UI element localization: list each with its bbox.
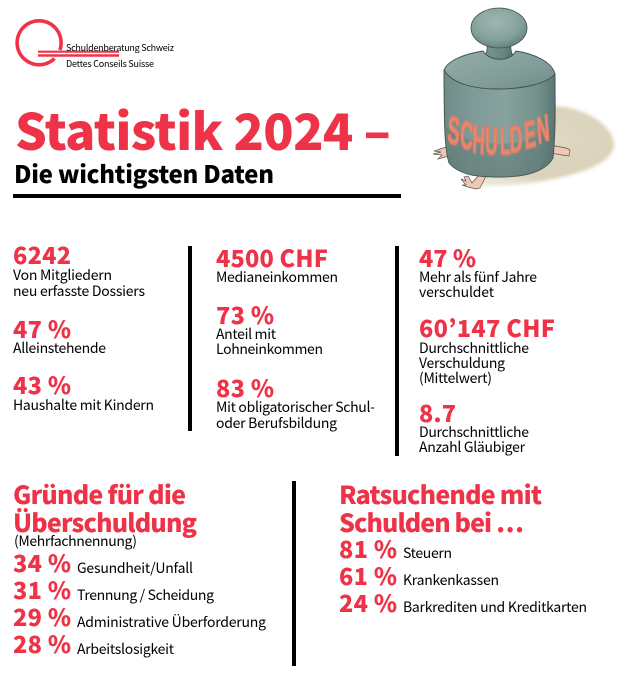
shadow — [468, 106, 614, 186]
stat: 60’147 CHF: Durchschnittliche — [419, 338, 529, 358]
illustration: weight labelled SCHULDEN crushing a person — [433, 8, 614, 189]
stat: 4500 CHF: Medianeinkommen — [216, 267, 338, 287]
row: 31 %: 31 % — [13, 572, 71, 606]
panel: Ratsuchende mit Schulden bei — [339, 476, 587, 619]
SCHULDEN label: H — [472, 118, 486, 163]
row: 81 %: 81 % — [339, 531, 397, 565]
row: 29 %: 29 % — [13, 599, 71, 633]
stat: 83 % — [216, 370, 375, 433]
row: 61 %: Krankenkassen — [403, 570, 499, 590]
title: Statistik 2024 – — [15, 93, 391, 165]
heading: Gründe für die — [13, 476, 186, 512]
panel: Gründe für die Überschuldung — [13, 476, 266, 660]
row: 34 % — [13, 545, 193, 579]
column divider — [395, 246, 399, 456]
heading: Überschuldung — [13, 504, 197, 540]
SCHULDEN label: L — [500, 121, 510, 164]
SCHULDEN label: N — [535, 108, 551, 153]
row: 24 % — [339, 585, 587, 619]
heading — [339, 476, 542, 540]
stat: 73 %: Anteil mit — [216, 324, 277, 344]
row: 61 % — [339, 558, 499, 592]
stat: 6242: 6242 — [13, 237, 71, 271]
stat: 6242 — [13, 237, 145, 301]
row: 24 %: 24 % — [339, 585, 397, 619]
row: 31 %: Trennung / Scheidung — [77, 585, 214, 605]
SCHULDEN label — [446, 108, 551, 164]
stat: 8.7: Durchschnittliche — [419, 422, 529, 442]
stat: 60’147 CHF: (Mittelwert) — [419, 368, 492, 388]
SCHULDEN label: D — [509, 118, 523, 162]
row: 28 %: 28 % — [13, 626, 71, 660]
SCHULDEN label: S — [446, 109, 461, 155]
stat: 6242: Von Mitgliedern — [13, 265, 112, 285]
row: 28 %: Arbeitslosigkeit — [77, 639, 175, 659]
row: 24 %: Barkrediten und Kreditkarten — [403, 597, 587, 617]
logo text: Dettes Conseils Suisse — [66, 57, 154, 70]
heading: Ratsuchende mit — [339, 476, 542, 512]
SCHULDEN label: C — [459, 114, 474, 159]
stat: 47 %: Mehr als fünf Jahre — [419, 267, 537, 287]
stat: 47 %: 47 % — [13, 311, 71, 345]
logo: Schuldenberatung Schweiz — [17, 21, 174, 70]
stat: 83 %: oder Berufsbildung — [216, 413, 337, 433]
note: (Mehrfachnennung) — [14, 531, 137, 551]
stat: 60’147 CHF: Verschuldung — [419, 353, 505, 373]
logo text — [66, 41, 174, 70]
stat: 8.7: Anzahl Gläubiger — [419, 437, 526, 457]
stat: 43 %: 43 % — [13, 367, 71, 401]
row: 34 %: 34 % — [13, 545, 71, 579]
heading: Schulden bei … — [339, 504, 524, 540]
logo text: Schuldenberatung Schweiz — [66, 41, 174, 54]
stat: 43 %: Haushalte mit Kindern — [13, 395, 154, 415]
stat: 8.7 — [419, 395, 529, 457]
stat: 73 %: Lohneinkommen — [216, 339, 323, 359]
stat: 47 % — [419, 240, 537, 302]
stat: 83 %: Mit obligatorischer Schul- — [216, 397, 375, 417]
stat: 47 %: Alleinstehende — [13, 338, 106, 358]
row: 31 % — [13, 572, 214, 606]
stat: 4500 CHF — [216, 240, 338, 287]
row: 34 %: Gesundheit/Unfall — [77, 558, 193, 578]
row: 29 % — [13, 599, 266, 633]
row: 81 % — [339, 531, 452, 565]
weight body — [444, 51, 555, 177]
heading — [13, 476, 197, 540]
stat: 73 % — [216, 297, 323, 359]
SCHULDEN label: U — [485, 120, 498, 164]
stat: 8.7: 8.7 — [419, 395, 456, 429]
stat: 60’147 CHF — [419, 310, 555, 388]
stat: 47 %: verschuldet — [419, 282, 495, 302]
column divider — [188, 246, 192, 431]
stat: 73 %: 73 % — [216, 297, 274, 331]
stat: 4500 CHF: 4500 CHF — [216, 240, 328, 274]
panel: column 3 statistics — [419, 240, 555, 457]
row: 81 %: Steuern — [403, 543, 452, 563]
title rule — [13, 194, 401, 198]
row: 29 %: Administrative Überforderung — [77, 612, 266, 632]
panel: column 1 statistics — [13, 237, 154, 415]
SCHULDEN label: E — [523, 113, 537, 158]
row: 28 % — [13, 626, 175, 660]
stat: 60’147 CHF: 60’147 CHF — [419, 310, 555, 344]
row: 61 %: 61 % — [339, 558, 397, 592]
panel: column 2 statistics — [216, 240, 375, 433]
column divider — [292, 481, 296, 666]
stat: 43 % — [13, 367, 154, 415]
stat: 47 % — [13, 311, 106, 358]
stat: 47 %: 47 % — [419, 240, 476, 274]
subtitle: Die wichtigsten Daten — [14, 155, 274, 190]
logo mark — [17, 21, 119, 65]
hands and feet — [433, 145, 570, 189]
stat: 6242: neu erfasste Dossiers — [13, 281, 145, 301]
knob and neck — [471, 8, 527, 63]
stat: 83 %: 83 % — [216, 370, 274, 404]
